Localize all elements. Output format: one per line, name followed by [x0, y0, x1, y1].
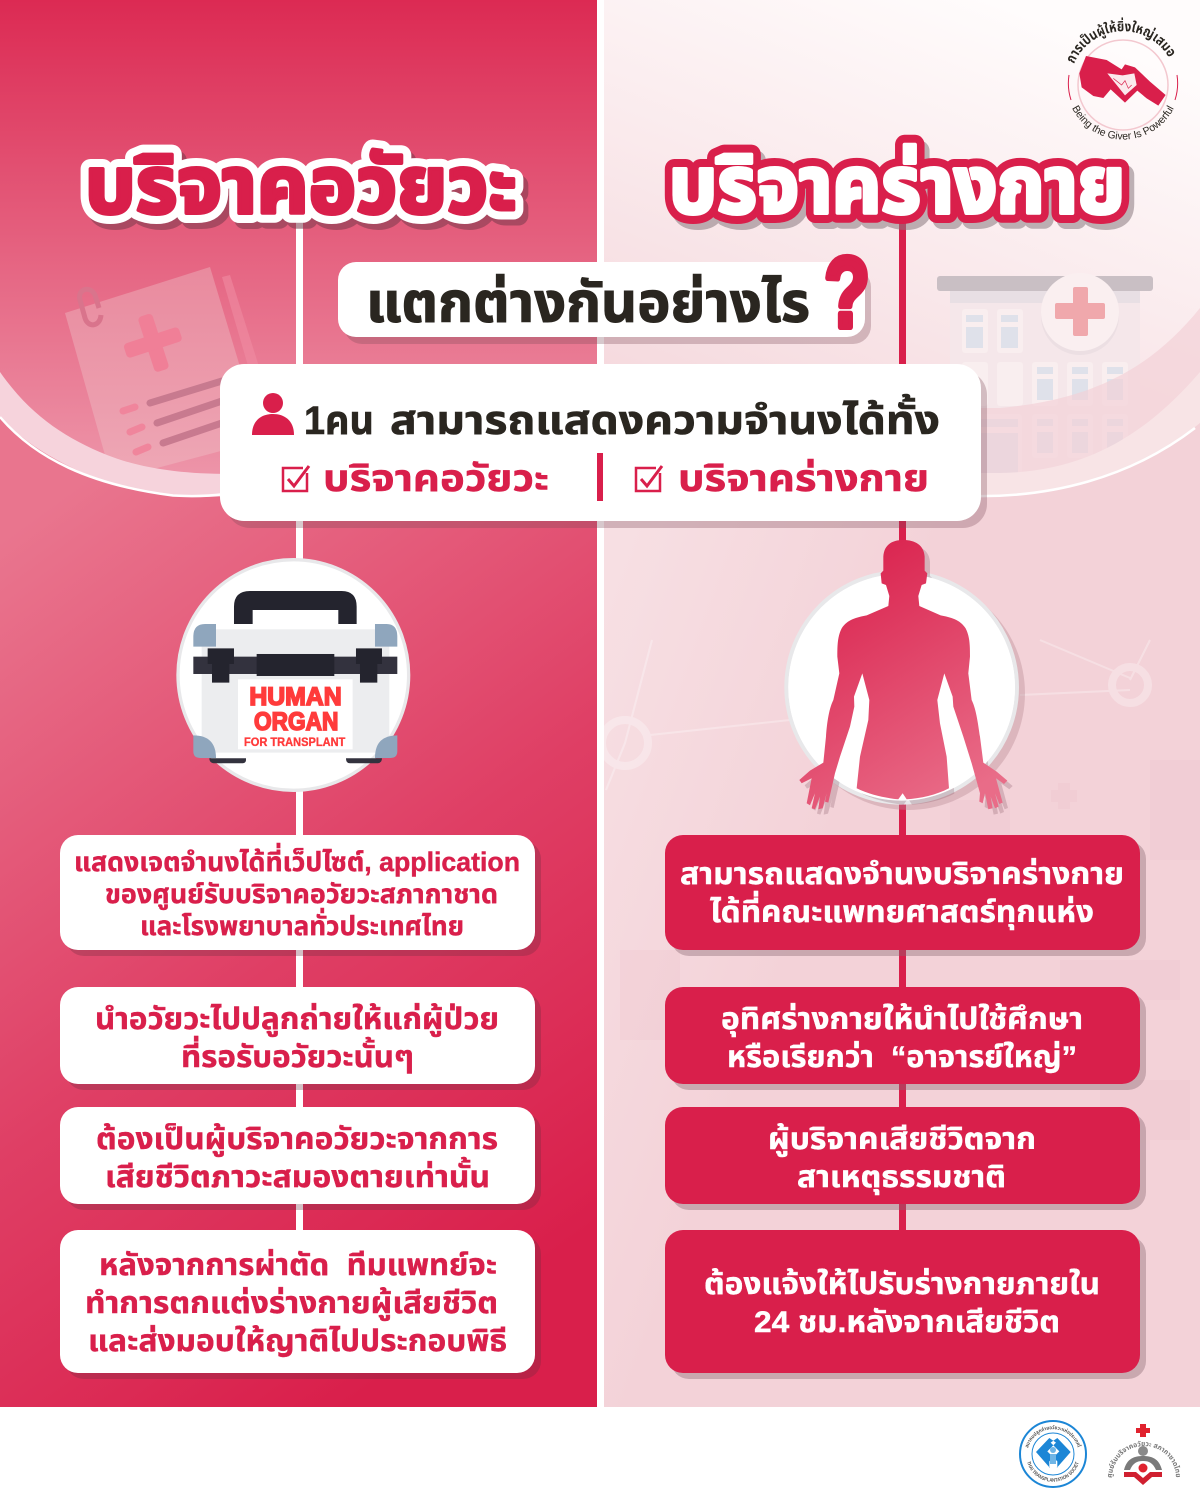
- card: where to pledge organ: ของศูนย์รับบริจาคอวัยวะสภากาชาด: [105, 879, 498, 910]
- icon: organ transplant cooler: ORGAN: [254, 708, 338, 736]
- card: notify within 24 hours: [665, 1230, 1146, 1379]
- card: after surgery: และส่งมอบให้ญาติไปประกอบพิธี: [88, 1325, 507, 1358]
- heading: right title: บริจาคร่างกาย: [669, 141, 1125, 230]
- card: brain death requirement: [60, 1107, 541, 1210]
- callout: question pill: [338, 237, 871, 349]
- card: notify within 24 hours: ต้องแจ้งให้ไปรับร่างกายภายใน: [704, 1268, 1100, 1301]
- card: transplant purpose: ที่รอรับอวัยวะนั้นๆ: [181, 1035, 414, 1074]
- callout: question pill: แตกต่างกันอย่างไร: [366, 271, 810, 334]
- card: where to pledge body: สามารถแสดงจำนงบริจาคร่างกาย: [680, 858, 1124, 891]
- card: where to pledge organ: แสดงเจตจำนงได้ที่เว็ปไซต์, application: [74, 843, 520, 877]
- card: brain death requirement: ต้องเป็นผู้บริจาคอวัยวะจากการ: [96, 1123, 498, 1157]
- text: one person statement: สามารถแสดงความจำนงได้ทั้ง: [390, 393, 940, 443]
- logo: Thai Transplantation Society: สมาคมปลูกถ่ายอวัยวะแห่งประเทศไทย: [1026, 1425, 1082, 1448]
- decorative curved band left: [0, 372, 220, 496]
- logo: being the giver: การเป็นผู้ให้ยิ่งใหญ่เสมอ: [1068, 17, 1174, 64]
- panel: left organ donation background: [0, 0, 597, 1407]
- heading: left title: บริจาคอวัยวะ: [90, 147, 522, 236]
- card: for study: [665, 987, 1146, 1090]
- callout: question pill: ?: [824, 237, 870, 349]
- text: body donation option: บริจาคร่างกาย: [678, 458, 929, 499]
- card: natural causes: สาเหตุธรรมชาติ: [797, 1161, 1006, 1195]
- heading: right title: บริจาคร่างกาย: [674, 147, 1130, 236]
- card: where to pledge organ: และโรงพยาบาลทั่วประเทศไทย: [140, 908, 464, 941]
- card: after surgery: [60, 1230, 541, 1379]
- card: natural causes: ผู้บริจาคเสียชีวิตจาก: [768, 1123, 1036, 1157]
- icon: human body figure: [786, 540, 1025, 815]
- logo: Thai Transplantation Society: THAI TRANSPLANTATION SOCIETY: [1027, 1461, 1078, 1482]
- decorative curved bands right: [981, 308, 1200, 473]
- icon: checkbox right: [636, 466, 662, 491]
- card: transplant purpose: [60, 987, 541, 1090]
- card: where to pledge body: [665, 835, 1146, 956]
- card: for study: อุทิศร่างกายให้นำไปใช้ศึกษา: [721, 1003, 1083, 1037]
- heading: left title: บริจาคอวัยวะ: [85, 141, 517, 230]
- panel: right body donation background: [602, 0, 1200, 1407]
- text: organ donation option: บริจาคอวัยวะ: [323, 458, 549, 499]
- card: brain death requirement: เสียชีวิตภาวะสมองตายเท่านั้น: [105, 1156, 490, 1194]
- heading: left title: บริจาคอวัยวะ: [85, 141, 517, 230]
- logo: being the giver: Being the Giver Is Powerful: [1072, 105, 1174, 140]
- text: one person statement: 1คน: [304, 399, 374, 443]
- icon: faded hospital: [937, 276, 1153, 452]
- card: for study: หรือเรียกว่า “อาจารย์ใหญ่”: [727, 1041, 1077, 1074]
- divider: [597, 453, 603, 501]
- panel: one person can pledge both: [220, 364, 987, 528]
- logo: being the giver: [1068, 17, 1178, 140]
- card: after surgery: ทำการตกแต่งร่างกายผู้เสียชีวิต: [85, 1287, 498, 1321]
- panel: left info cards: [60, 835, 541, 1379]
- logo: Thai Red Cross organ donation centre: [1108, 1424, 1180, 1485]
- text: one person statement: [304, 393, 940, 443]
- card: transplant purpose: นำอวัยวะไปปลูกถ่ายให้แก่ผู้ป่วย: [95, 1003, 499, 1037]
- icon: faded clipboard: [65, 267, 258, 468]
- logo: Thai Red Cross organ donation centre: ศูนย์รับบริจาคอวัยวะ สภากาชาดไทย: [1108, 1440, 1180, 1478]
- icon: checkbox left: [283, 466, 309, 491]
- panel: right info cards: [665, 835, 1146, 1379]
- heading: right title: บริจาคร่างกาย: [669, 141, 1125, 230]
- center line left: [296, 215, 303, 1240]
- card: natural causes: [665, 1107, 1146, 1210]
- icon: person: [252, 393, 294, 435]
- card: where to pledge organ: [60, 835, 541, 956]
- card: notify within 24 hours: 24 ชม.หลังจากเสียชีวิต: [754, 1306, 1060, 1339]
- icon: organ transplant cooler: HUMAN: [249, 683, 342, 711]
- card: after surgery: หลังจากการผ่าตัด ทีมแพทย์จะ: [99, 1249, 497, 1282]
- icon: organ transplant cooler: [178, 560, 409, 790]
- center line right: [899, 215, 906, 1240]
- faded network nodes and crosses: [602, 640, 1150, 790]
- icon: organ transplant cooler: FOR TRANSPLANT: [244, 735, 346, 749]
- card: where to pledge body: ได้ที่คณะแพทยศาสตร์ทุกแห่ง: [710, 890, 1094, 930]
